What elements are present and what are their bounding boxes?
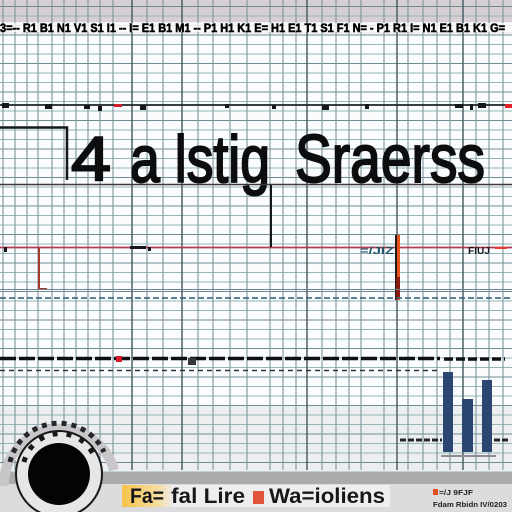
rule: middle divider	[0, 184, 512, 186]
rule: red divider	[0, 246, 512, 257]
title frame	[0, 128, 67, 180]
footer band	[0, 472, 512, 512]
marker: orange vertical bar	[395, 235, 400, 300]
title: a lstig	[130, 122, 270, 196]
bar chart	[400, 372, 510, 456]
marker: black vertical line	[270, 185, 272, 247]
rule: upper divider	[0, 103, 512, 111]
footer title: Wa=ioliens	[269, 485, 385, 508]
title	[71, 121, 485, 197]
title: 4	[71, 125, 111, 194]
footer title: fal Lire	[171, 485, 245, 508]
text row: lower	[0, 356, 505, 370]
footer note: Fdam Rbidn IV/0203	[433, 502, 507, 509]
rule: dashed rows	[0, 290, 512, 298]
footer title: Fa=	[130, 485, 164, 508]
footer note: =/J 9FJF	[439, 490, 474, 497]
rule: red divider: FIUJ	[468, 246, 490, 257]
footer title	[122, 485, 390, 508]
top band	[0, 0, 512, 22]
marker: left red bracket	[39, 247, 47, 289]
badge	[4, 423, 114, 512]
footer note	[433, 489, 507, 509]
rule: red divider: =/JIZ	[360, 246, 394, 257]
